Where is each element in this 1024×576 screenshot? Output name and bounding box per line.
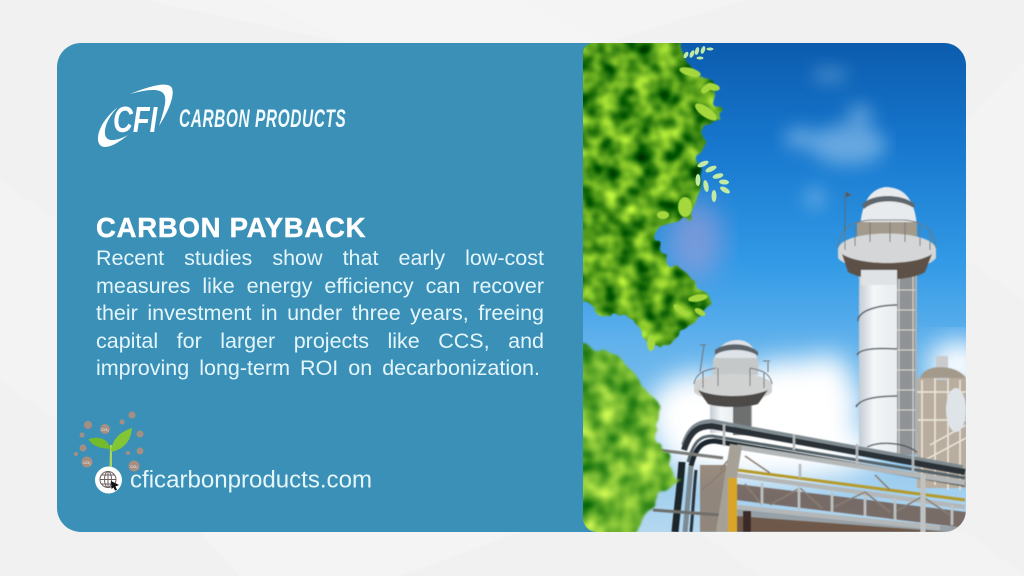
pipe rack — [653, 421, 966, 532]
side plant structure — [917, 356, 966, 490]
panel: main card — [57, 43, 966, 532]
icon: sprout with CO2 bubbles: CO₂ — [83, 460, 91, 465]
body text: improving long-term ROI on decarbonization. — [96, 356, 540, 380]
icon: sprout with CO2 bubbles: CO₂ — [130, 464, 138, 469]
body text: measures like energy efficiency can recover — [96, 274, 544, 298]
body text: Recent studies show that early low-cost — [96, 246, 544, 270]
icon: sprout with CO2 bubbles: CO₂ — [101, 427, 109, 432]
body text — [96, 246, 544, 380]
clouds — [642, 60, 966, 494]
foliage lower — [575, 345, 680, 540]
logo: CFI Carbon Products: CFI — [113, 99, 158, 140]
icon: globe cursor — [95, 466, 122, 494]
icon: sprout with CO2 bubbles — [74, 412, 144, 472]
foliage bright leaves — [647, 65, 721, 351]
heading: CARBON PAYBACK — [96, 212, 366, 243]
website url: cficarbonproducts.com — [130, 466, 372, 494]
small tower — [694, 340, 772, 435]
body text: their investment in under three years, freeing — [96, 301, 544, 325]
logo: CFI Carbon Products — [98, 84, 346, 147]
pale leaflets — [683, 46, 731, 202]
main tower — [838, 187, 936, 455]
logo: CFI Carbon Products: CARBON PRODUCTS — [179, 105, 346, 133]
photo: power plant and foliage — [583, 43, 966, 532]
sky — [583, 43, 966, 532]
body text: capital for larger projects like CCS, and — [96, 329, 544, 353]
foliage upper — [575, 35, 724, 352]
